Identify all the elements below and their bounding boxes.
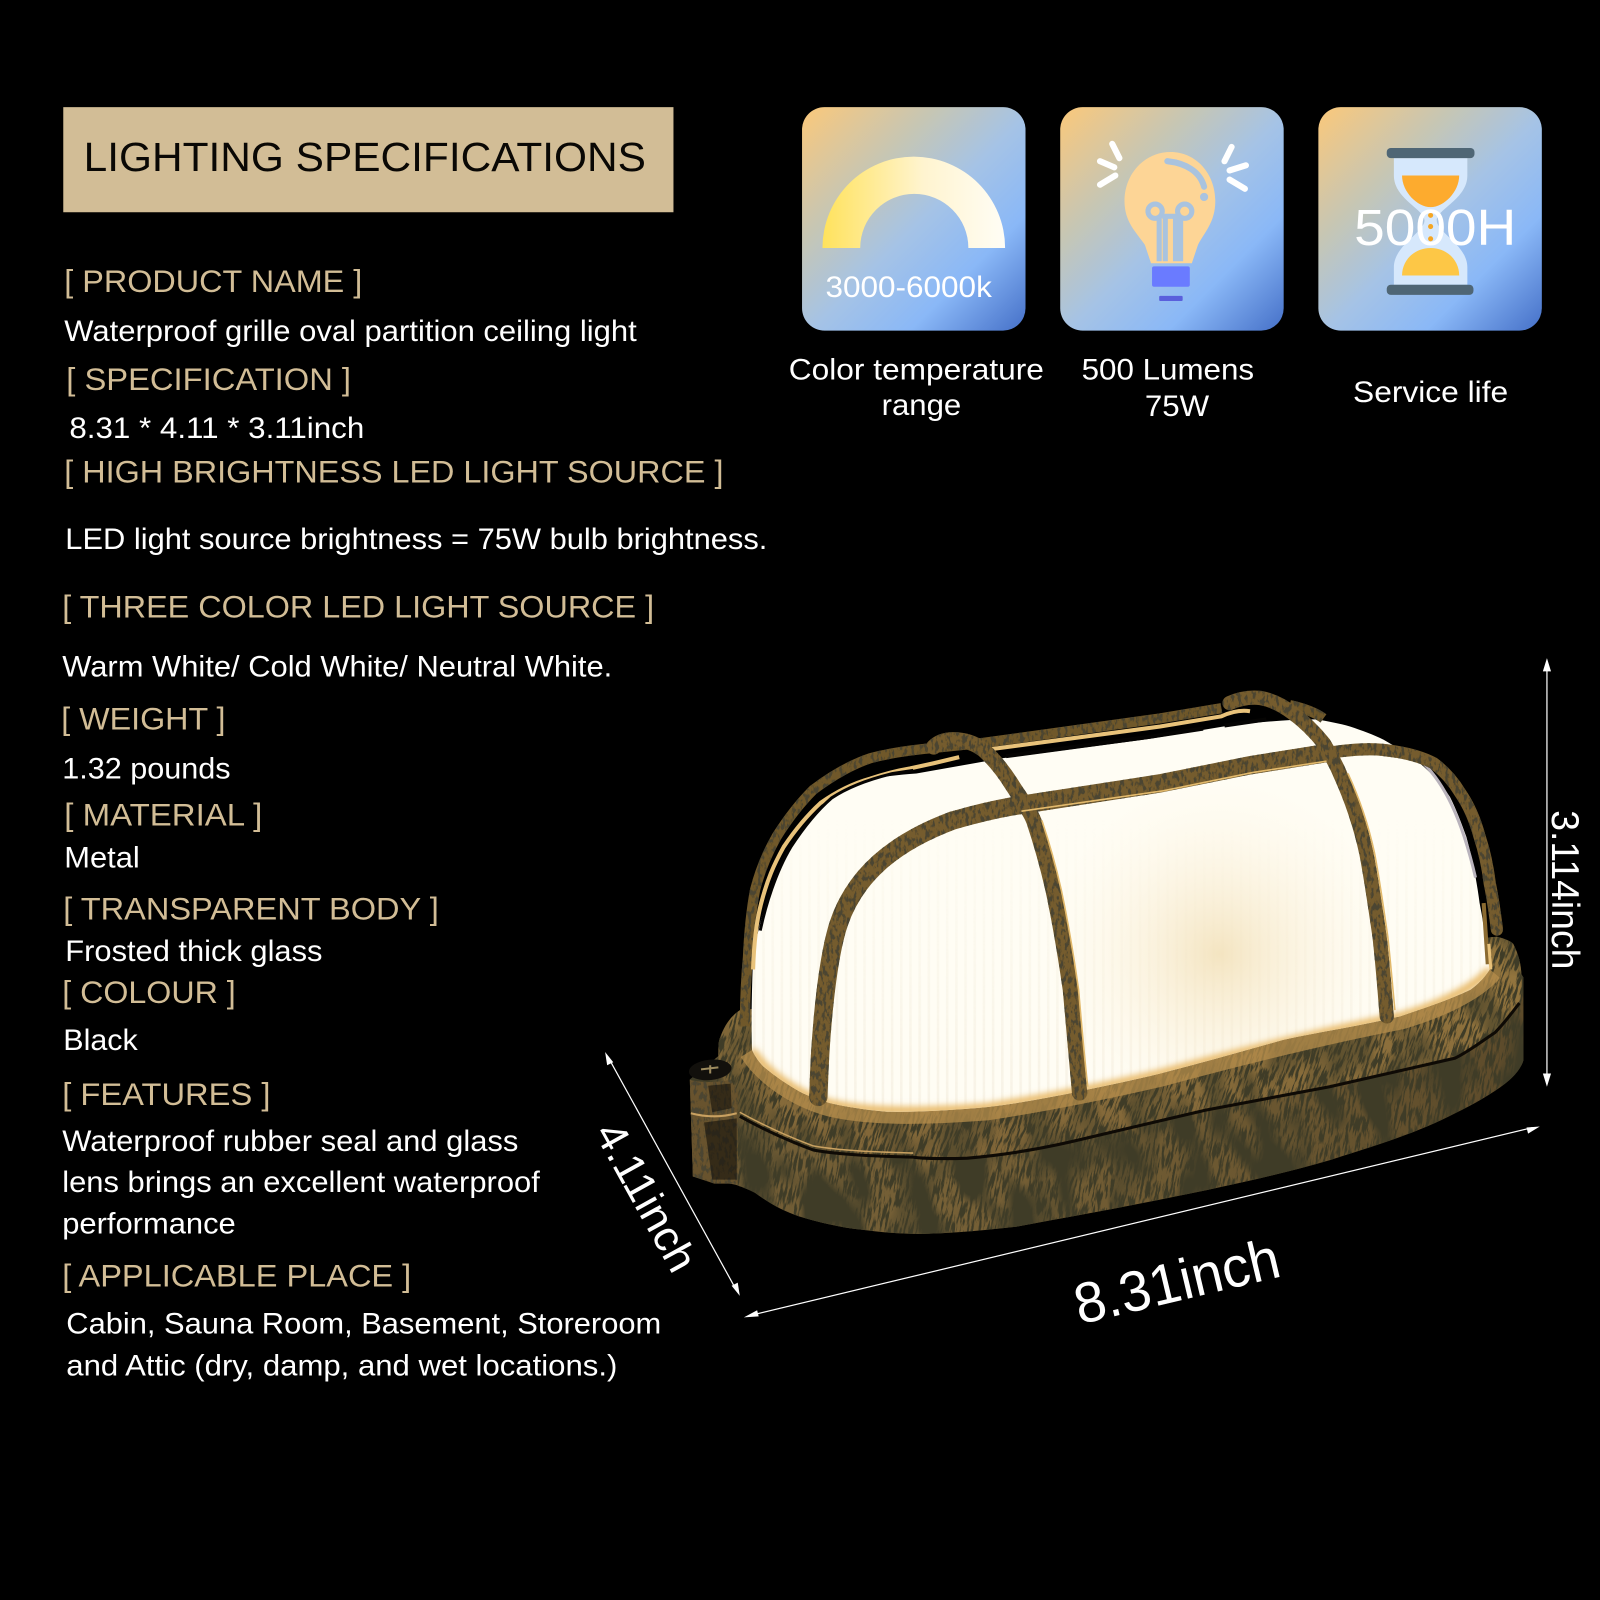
text: product name: Waterproof grille oval partition ceiling light xyxy=(64,315,637,348)
caption: lumens: 500 Lumens xyxy=(1082,354,1254,387)
cage bars xyxy=(934,698,1387,1093)
text: brightness: LED light source brightness = 75W bulb brightness. xyxy=(65,523,767,556)
text: glass: Frosted thick glass xyxy=(65,935,322,968)
text: weight: 1.32 pounds xyxy=(62,753,231,786)
dimension label: depth: 4.11inch xyxy=(585,1114,706,1280)
dimension arrow: depth xyxy=(605,1052,740,1296)
heading: features: [ FEATURES ] xyxy=(62,1077,270,1112)
text: features xyxy=(62,1125,541,1241)
dimension label: width: 8.31inch xyxy=(1068,1226,1286,1337)
panel: color temperature card xyxy=(802,107,1026,331)
heading: product name: [ PRODUCT NAME ] xyxy=(64,264,362,299)
icon: light bulb xyxy=(1100,144,1246,301)
caption: color temperature: range xyxy=(882,389,961,422)
dimension arrow: height xyxy=(1543,658,1551,1087)
text: places: and Attic (dry, damp, and wet locations.) xyxy=(66,1350,617,1383)
title banner xyxy=(63,107,673,212)
panel: specification list xyxy=(61,264,767,1383)
back cage frame xyxy=(745,705,1491,1027)
frosted glass dome xyxy=(752,719,1490,1112)
panel: service life card xyxy=(1318,107,1542,331)
caption: color temperature: Color temperature xyxy=(789,354,1044,387)
heading: applicable place: [ APPLICABLE PLACE ] xyxy=(62,1259,411,1294)
front cage frame xyxy=(818,749,1497,1097)
caption: lumens xyxy=(1082,354,1254,423)
heading: transparent body: [ TRANSPARENT BODY ] xyxy=(63,891,439,926)
heading: weight: [ WEIGHT ] xyxy=(61,702,226,737)
text: temperature range: 3000-6000k xyxy=(826,271,992,304)
title: LIGHTING SPECIFICATIONS xyxy=(84,134,646,180)
dimension label: height: 3.114inch xyxy=(1543,810,1586,969)
caption: color temperature xyxy=(789,354,1044,422)
cage highlights xyxy=(1021,761,1395,1087)
text: 5000H: 5000H xyxy=(1354,199,1516,256)
text: features: lens brings an excellent waterproof xyxy=(62,1166,541,1199)
text: features: performance xyxy=(62,1208,236,1241)
product: oval caged ceiling light xyxy=(689,690,1524,1234)
text: dimensions: 8.31 * 4.11 * 3.11inch xyxy=(69,412,364,445)
icon: color temperature arch xyxy=(822,157,1005,248)
heading: high brightness: [ HIGH BRIGHTNESS LED LIGHT SOURCE ] xyxy=(64,455,723,490)
text: material: Metal xyxy=(64,841,140,874)
text: places xyxy=(66,1308,661,1383)
base body xyxy=(690,936,1524,1234)
text: places: Cabin, Sauna Room, Basement, Storeroom xyxy=(66,1308,661,1341)
heading: three color: [ THREE COLOR LED LIGHT SOURCE ] xyxy=(62,589,654,624)
heading: specification: [ SPECIFICATION ] xyxy=(66,362,351,397)
heading: material: [ MATERIAL ] xyxy=(64,798,262,833)
caption: service life: Service life xyxy=(1353,376,1508,409)
mounting lug with screw xyxy=(688,1058,738,1184)
text: features: Waterproof rubber seal and glass xyxy=(62,1125,518,1158)
text: colour: Black xyxy=(63,1024,138,1057)
icon: hourglass xyxy=(1387,148,1474,295)
heading: colour: [ COLOUR ] xyxy=(62,975,236,1010)
rim xyxy=(718,936,1522,1160)
caption: lumens: 75W xyxy=(1145,390,1209,423)
panel: lumens card xyxy=(1060,107,1284,331)
text: colors: Warm White/ Cold White/ Neutral White. xyxy=(62,651,612,684)
dimension arrow: width xyxy=(744,1127,1540,1317)
